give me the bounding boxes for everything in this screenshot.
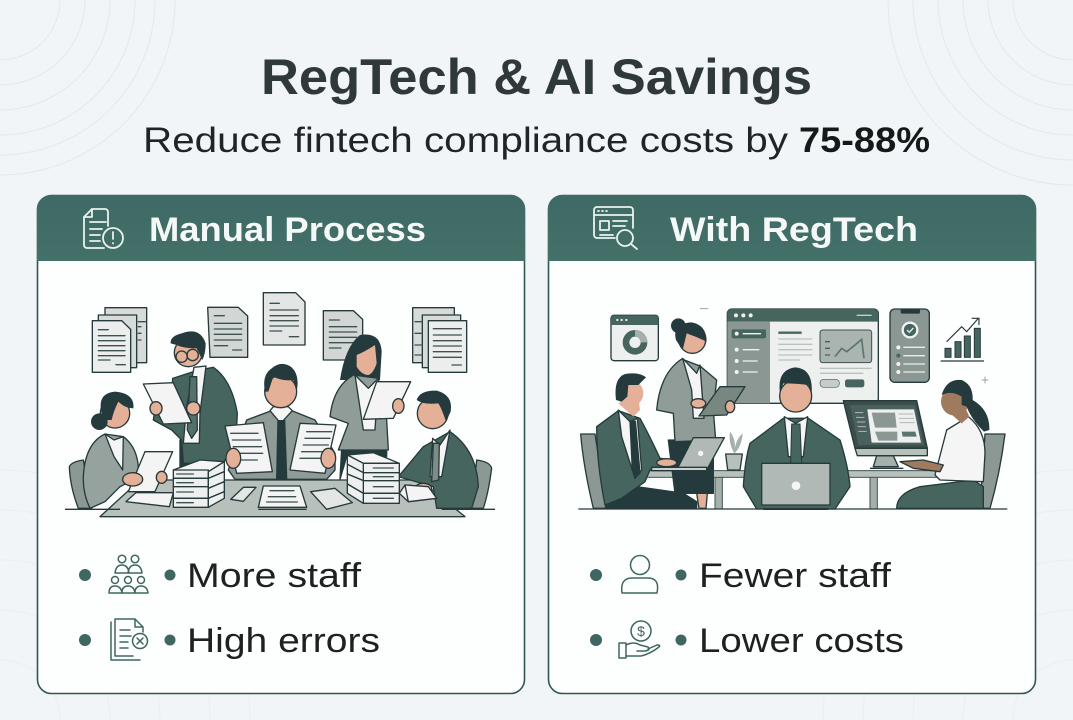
items on table	[231, 485, 437, 509]
table with paper stacks	[65, 480, 495, 517]
panel header: manual process	[37, 195, 525, 261]
illustration: team with digital tools	[578, 309, 1007, 509]
bullet: lower costs	[590, 621, 904, 660]
icon: window with magnifier	[594, 207, 637, 249]
dashboard window	[727, 309, 878, 403]
person: standing woman with tablet	[657, 318, 745, 508]
icon: money in hand	[619, 621, 660, 658]
bullet: lower costs: Lower costs	[699, 622, 904, 660]
heading: manual process: Manual Process	[149, 211, 426, 249]
phone	[890, 309, 929, 382]
panel header: with regtech	[548, 195, 1036, 261]
decorative sparks	[700, 309, 988, 383]
plant	[726, 432, 743, 470]
person: seated woman left	[69, 392, 173, 508]
bullet: more staff: More staff	[187, 557, 362, 595]
title: RegTech & AI Savings	[261, 49, 812, 105]
icon: document with error	[111, 619, 148, 660]
bullet: more staff	[79, 555, 362, 595]
paper stacks	[173, 453, 399, 507]
subtitle: Reduce fintech compliance costs by	[143, 121, 789, 160]
person: standing woman	[330, 335, 411, 479]
person: seated man right	[398, 391, 492, 508]
bullet: high errors	[79, 619, 380, 660]
person: central man	[743, 367, 850, 509]
person: man with laptop	[581, 373, 724, 508]
growth bar chart	[941, 318, 984, 361]
bullet: fewer staff	[590, 556, 892, 595]
person: central man with papers	[225, 364, 336, 479]
illustration: stressed team with paperwork	[65, 293, 495, 517]
icon: team	[109, 555, 148, 593]
person: standing man with glasses	[143, 331, 237, 470]
heading: with regtech: With RegTech	[670, 211, 918, 249]
desk	[578, 471, 1007, 509]
floating documents	[92, 293, 467, 372]
icon: money in hand: $	[637, 623, 645, 639]
bullet: fewer staff: Fewer staff	[699, 557, 892, 595]
small donut chart window	[611, 315, 658, 361]
panel: manual process	[37, 195, 525, 694]
subtitle: 75-88%	[799, 121, 930, 160]
icon: single person	[622, 556, 658, 593]
monitor	[843, 401, 927, 468]
person: woman at monitor	[897, 380, 1005, 508]
bullet: high errors: High errors	[187, 622, 380, 660]
icon: document warning	[84, 209, 123, 248]
panel: with regtech	[548, 195, 1036, 694]
